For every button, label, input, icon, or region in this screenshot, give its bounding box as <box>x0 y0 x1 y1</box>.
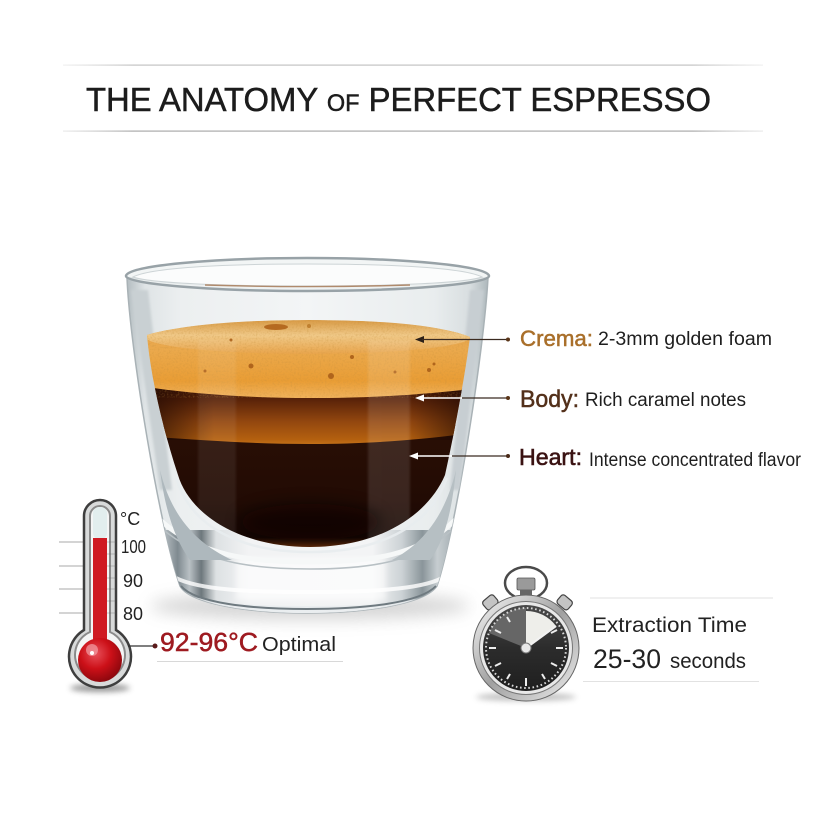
scale labels: 80 <box>123 604 143 624</box>
mercury column <box>93 538 107 648</box>
crema layer <box>140 330 480 398</box>
glass rim <box>133 264 482 286</box>
scale ticks <box>59 542 84 613</box>
callout: crema: 2-3mm golden foam <box>598 329 772 350</box>
dial ticks <box>486 608 566 688</box>
temperature value: 92-96°C <box>160 627 258 657</box>
crema grain <box>140 320 480 398</box>
glass tube <box>93 507 107 539</box>
side buttons <box>481 594 574 611</box>
outer case <box>473 595 579 701</box>
highlighted wedge <box>526 611 556 648</box>
callout: heart <box>409 444 802 471</box>
callout: body <box>415 386 746 413</box>
crema surface <box>146 320 470 354</box>
callout: crema: Crema: <box>520 326 593 351</box>
elapsed shading <box>489 608 526 648</box>
glass body <box>127 278 488 613</box>
heart layer <box>163 425 456 547</box>
crown stem <box>517 578 535 590</box>
stopwatch shadow <box>476 693 576 701</box>
glass shadow <box>150 592 470 620</box>
extraction time text <box>583 598 773 682</box>
callout: heart: Intense concentrated flavor <box>589 450 802 471</box>
vertical wall highlights <box>131 290 484 560</box>
optimal label: Optimal <box>262 634 336 656</box>
scale labels: 90 <box>123 571 143 591</box>
callout: crema <box>415 326 772 351</box>
scale labels: 100 <box>121 537 146 557</box>
bulb <box>78 638 122 682</box>
callout: body: Body: <box>520 386 579 413</box>
refraction streaks <box>198 340 236 532</box>
fine graduation marks <box>107 542 116 613</box>
glass base <box>160 520 455 616</box>
scale labels <box>120 509 146 624</box>
title: THE ANATOMY OF PERFECT ESPRESSO <box>86 82 711 119</box>
callout: body: Rich caramel notes <box>585 390 746 411</box>
thermometer <box>59 500 343 692</box>
stopwatch <box>473 567 579 701</box>
scale labels: °C <box>120 509 140 529</box>
callout: heart: Heart: <box>519 444 582 470</box>
temperature connector <box>128 645 155 647</box>
extraction time text: Extraction Time <box>592 614 747 637</box>
espresso liquid <box>140 320 480 555</box>
crown ring <box>505 567 547 599</box>
dial face <box>483 605 569 691</box>
extraction time text: 25-30 <box>593 644 661 674</box>
body layer <box>140 388 480 444</box>
extraction time text: seconds <box>670 650 746 673</box>
glass inner base curve <box>176 478 447 552</box>
bulb shadow <box>70 684 130 692</box>
espresso glass <box>126 258 489 616</box>
thermometer casing <box>69 500 131 688</box>
stopwatch hand <box>526 626 556 648</box>
